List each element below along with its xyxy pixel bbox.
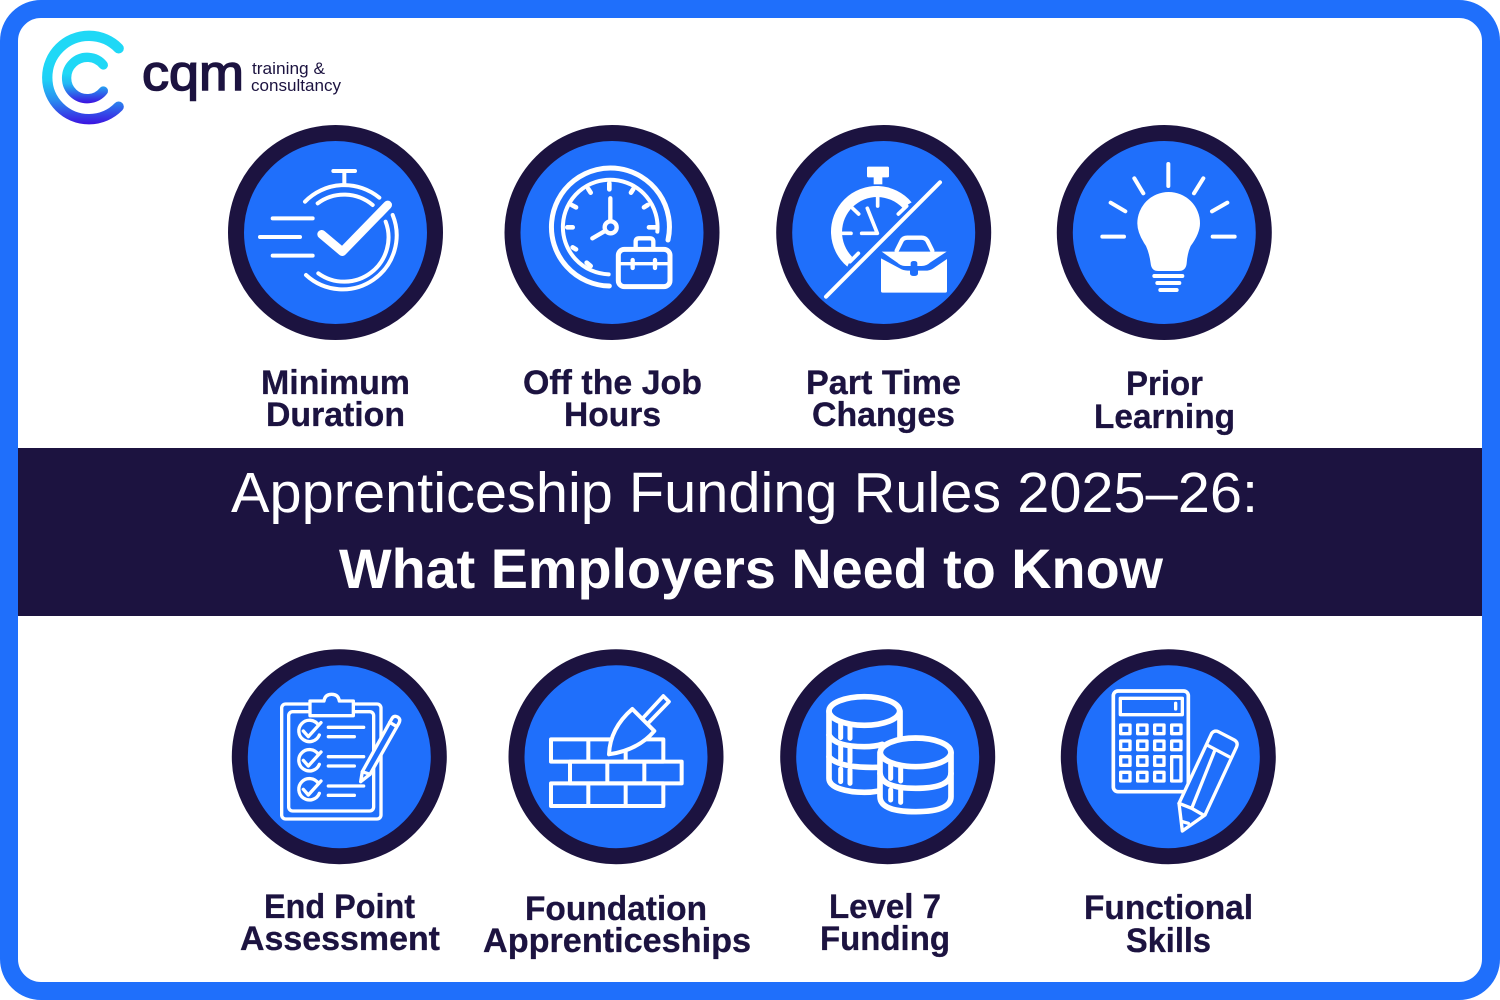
label: End Point Assessment: End Point [264, 888, 415, 926]
panel: icon Functional Skills [1069, 657, 1268, 856]
label: Part Time Changes [806, 364, 961, 434]
label: Level 7 Funding: Funding [820, 920, 950, 958]
title banner [18, 448, 1482, 616]
label: End Point Assessment: Assessment [240, 920, 440, 958]
label: Foundation Apprenticeships: Foundation [525, 890, 707, 928]
title line 2: What Employers Need to Know [339, 537, 1163, 600]
panel: icon Off the Job Hours [512, 133, 712, 332]
label: Foundation Apprenticeships [483, 890, 751, 960]
icon: calculator with pencil [1113, 691, 1237, 831]
label: Prior Learning: Learning [1094, 398, 1235, 436]
label: Level 7 Funding [820, 888, 950, 958]
label: Functional Skills: Skills [1126, 922, 1211, 960]
icon: clock with briefcase [551, 168, 670, 287]
label: Off the Job Hours [523, 364, 702, 434]
label: Minimum Duration [261, 364, 410, 434]
label: Prior Learning [1094, 365, 1235, 436]
label: Level 7 Funding: Level 7 [829, 888, 941, 926]
icon: light bulb [1102, 164, 1235, 290]
panel: icon Foundation Apprenticeships [516, 657, 716, 856]
label: Off the Job Hours: Hours [564, 396, 661, 434]
label: Off the Job Hours: Off the Job [523, 364, 702, 402]
label: End Point Assessment [240, 888, 440, 958]
panel: icon Minimum Duration [236, 133, 435, 332]
label: Minimum Duration: Minimum [261, 364, 410, 402]
label: Part Time Changes: Part Time [806, 364, 961, 402]
title line 1: Apprenticeship Funding Rules 2025–26: [231, 461, 1258, 525]
label: Minimum Duration: Duration [266, 396, 405, 434]
logo wordmark: cqm [142, 45, 244, 101]
panel: icon End Point Assessment [240, 657, 439, 856]
icon: brick wall with trowel [551, 696, 682, 806]
label: Functional Skills [1084, 889, 1253, 960]
logo mark [47, 36, 119, 119]
label: Foundation Apprenticeships: Apprenticeships [483, 922, 751, 960]
icon: stopwatch and briefcase split [826, 167, 947, 297]
icon: stopwatch with check [260, 171, 397, 289]
label: Functional Skills: Functional [1084, 889, 1253, 927]
logo tagline line 1: training & [252, 59, 326, 78]
logo tagline line 2: consultancy [251, 76, 341, 95]
icon: clipboard checklist with pencil [282, 694, 400, 819]
icon: coin stacks [829, 697, 951, 812]
panel: icon Part Time Changes [784, 133, 983, 332]
label: Prior Learning: Prior [1126, 365, 1203, 403]
label: Part Time Changes: Changes [812, 396, 955, 434]
panel: icon Prior Learning [1065, 133, 1264, 332]
panel: icon Level 7 Funding [788, 657, 987, 856]
logo: cqm training & consultancy [47, 36, 341, 119]
